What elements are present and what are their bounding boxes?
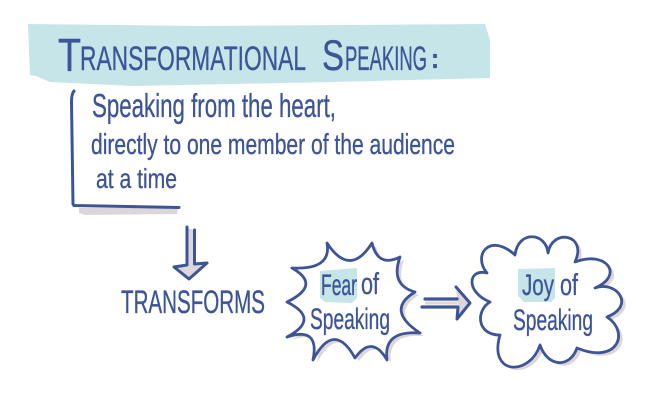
burst outline	[287, 243, 420, 360]
arrow: right	[422, 287, 470, 319]
title text: RANSFORMATIONAL	[80, 40, 306, 78]
text: speaking: Speaking	[310, 303, 390, 336]
cloud shadow	[476, 240, 626, 370]
highlight: joy	[518, 268, 555, 302]
text: joy of: of	[560, 267, 578, 302]
cloud: joy of speaking	[472, 237, 626, 370]
definition text: at a time	[96, 163, 177, 194]
highlight: fear	[320, 268, 357, 303]
title banner	[28, 24, 490, 86]
arrow: down	[174, 227, 207, 279]
title text: :	[431, 43, 439, 74]
burst: fear of speaking	[287, 243, 424, 363]
title text: T	[58, 29, 81, 81]
definition text: directly to one member of the audience	[91, 129, 455, 161]
text: fear of: Fear	[321, 269, 357, 302]
label: transforms: TRANSFORMS	[121, 284, 265, 320]
definition text	[91, 87, 455, 194]
text: fear of: of	[361, 266, 379, 301]
text: speaking: Speaking	[513, 304, 593, 337]
cloud outline	[472, 237, 622, 367]
banner background	[28, 24, 490, 86]
bracket	[72, 91, 179, 208]
text: joy of: Joy	[522, 269, 554, 302]
title text: S	[322, 32, 344, 80]
bracket shadow	[79, 208, 178, 215]
definition text: Speaking from the heart,	[92, 87, 336, 124]
title text: PEAKING	[345, 40, 427, 78]
definition block	[72, 87, 455, 215]
title text	[58, 29, 439, 81]
burst shadow	[291, 246, 424, 363]
